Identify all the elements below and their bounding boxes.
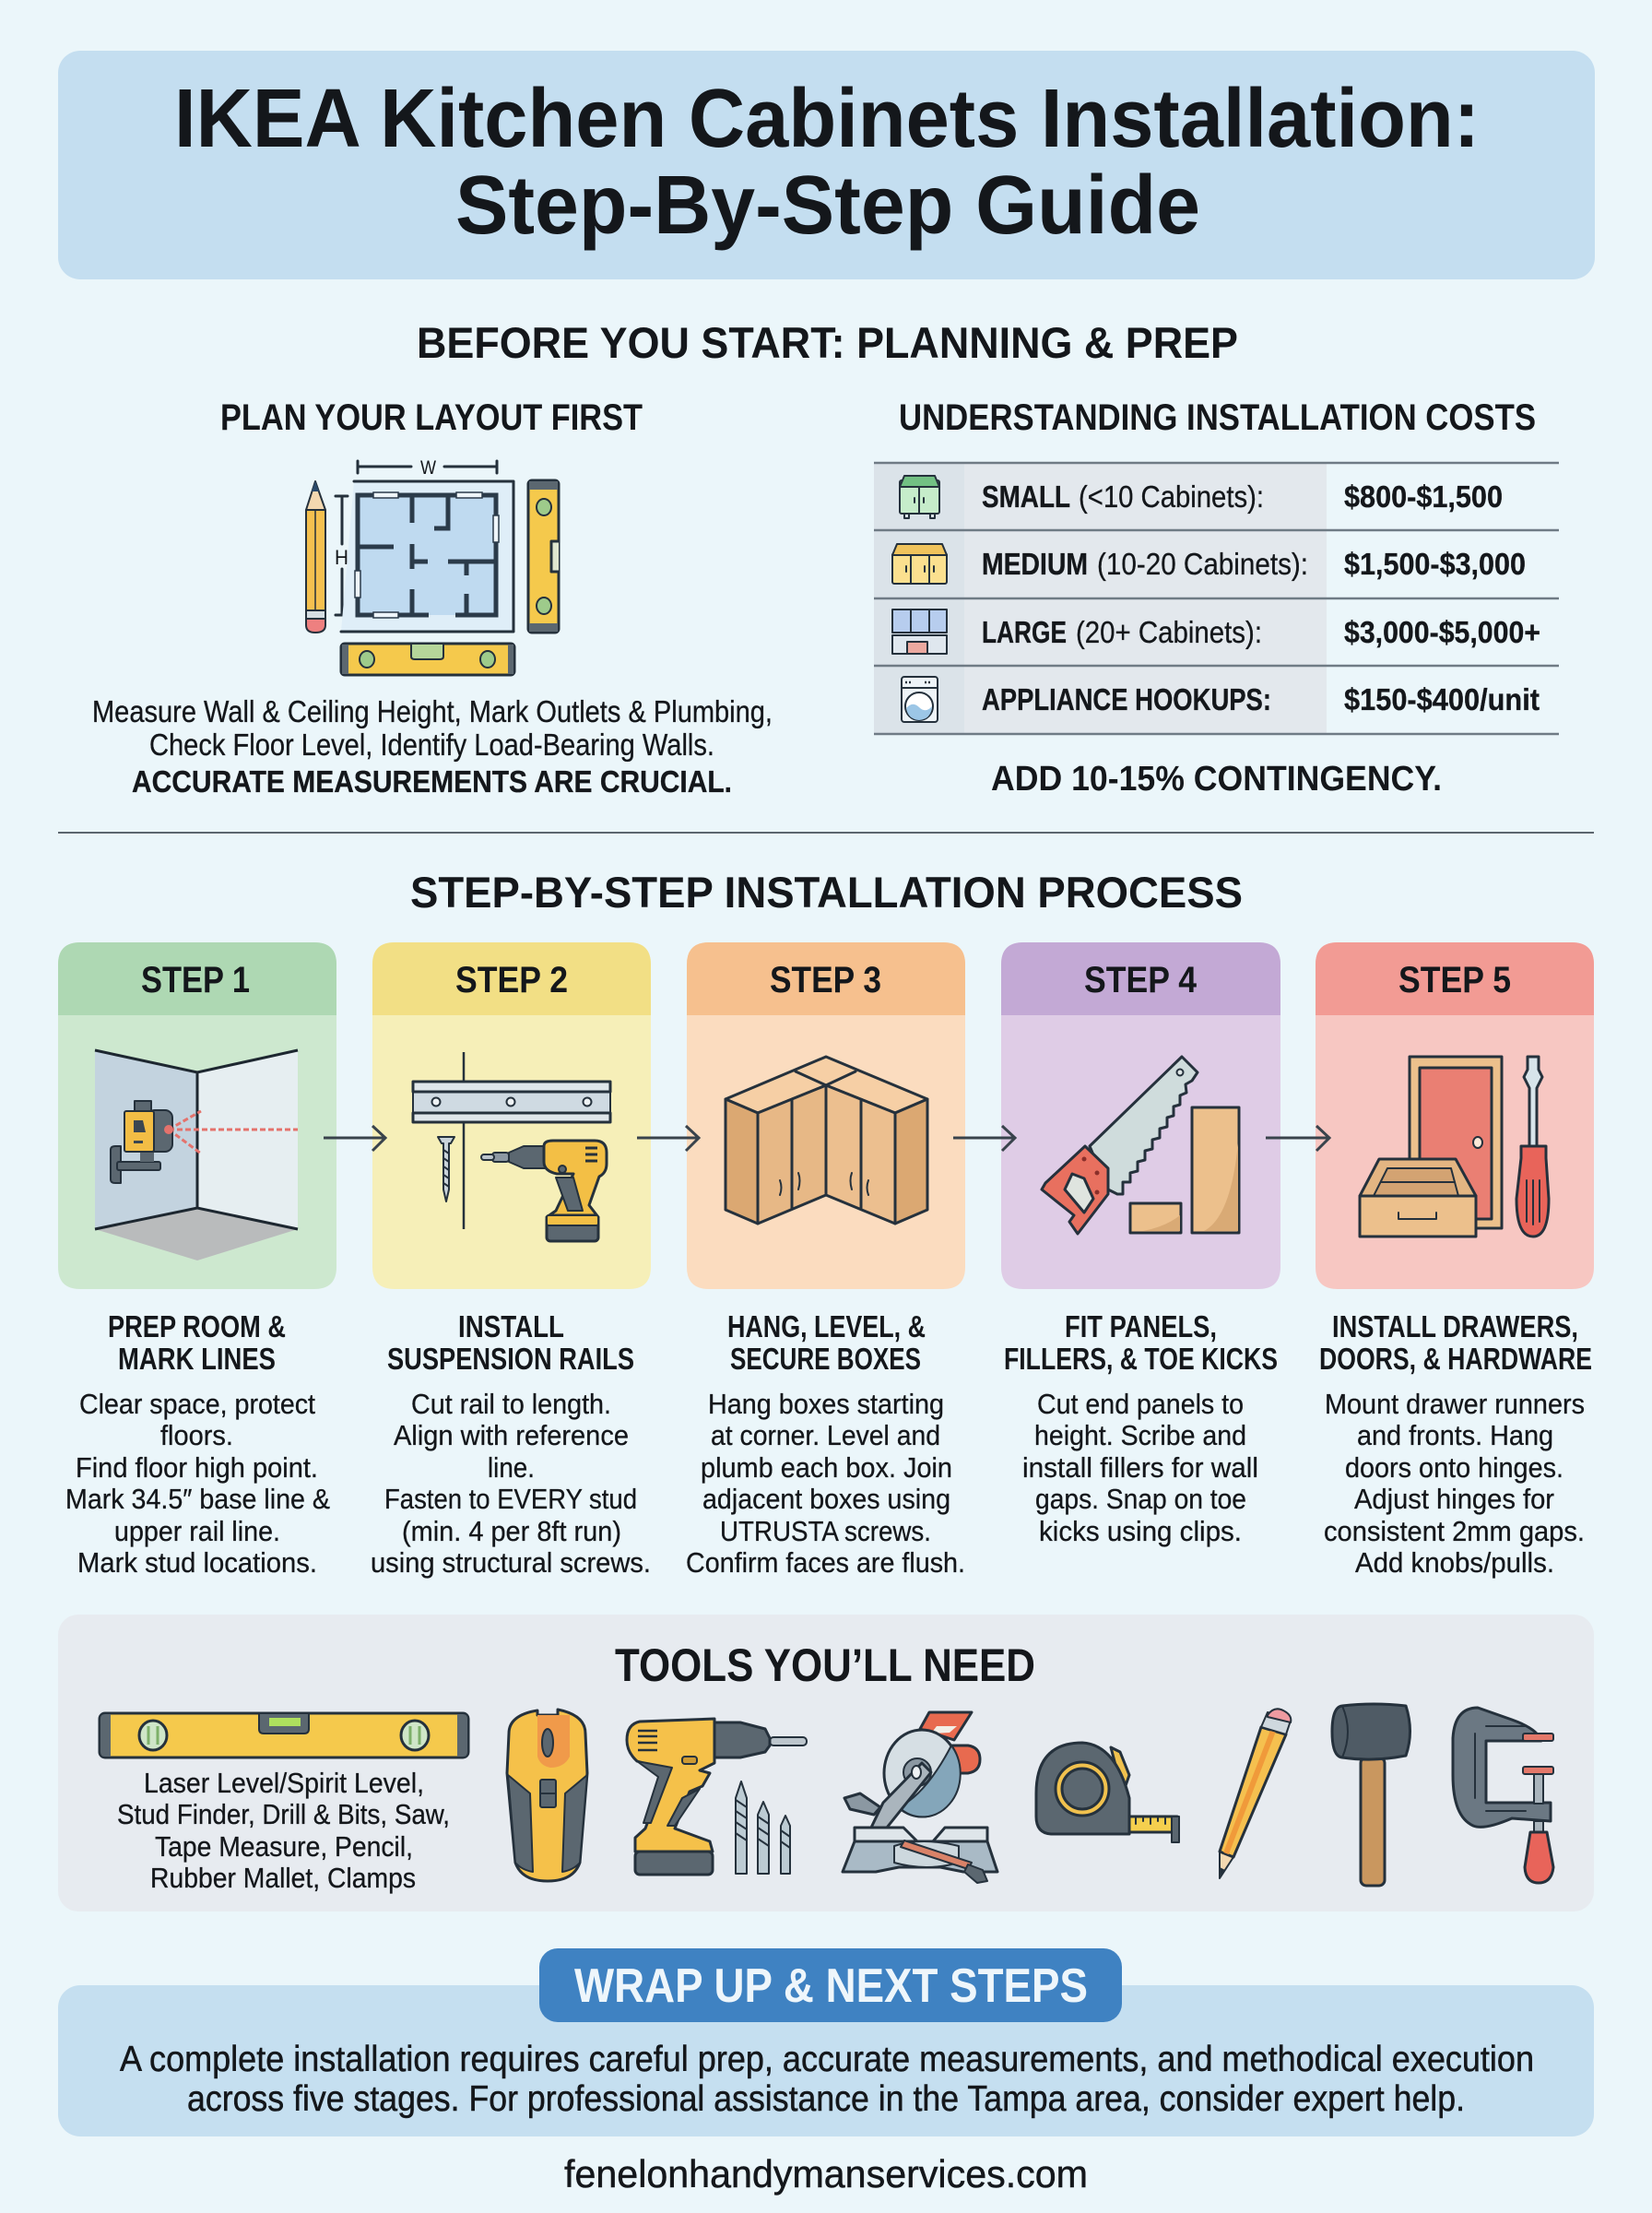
panel: tools <box>58 1615 1594 1911</box>
text block: summary: A complete installation requires careful prep, accurate measurements, and methodical execution <box>120 2040 1534 2079</box>
step 1 text: upper rail line. <box>114 1515 280 1547</box>
row: appliance hookups <box>902 677 1540 722</box>
step label: STEP 3 <box>770 960 881 1000</box>
step 3 text: at corner. Level and <box>711 1419 940 1451</box>
floor plan <box>341 481 513 632</box>
step 3 text <box>686 1309 965 1579</box>
arrow: step 3 to 4 <box>953 1126 1015 1151</box>
row: medium: (10-20 Cabinets): <box>1097 547 1308 581</box>
icon: hand saw and wood pieces <box>1042 1057 1239 1234</box>
step 2 text: Align with reference <box>394 1419 629 1451</box>
step 1 text: Mark 34.5″ base line & <box>65 1483 330 1515</box>
row: small: $800-$1,500 <box>1344 479 1503 514</box>
step 5 text: Mount drawer runners <box>1325 1388 1585 1420</box>
row: appliance hookups: APPLIANCE HOOKUPS: <box>982 682 1271 716</box>
icon: small cabinet <box>900 476 939 518</box>
row: large: $3,000-$5,000+ <box>1344 615 1540 649</box>
step 4 text <box>1004 1309 1278 1547</box>
wood pieces <box>1130 1107 1239 1233</box>
step 1 text: Clear space, protect <box>79 1388 315 1420</box>
step 3 text: HANG, LEVEL, & <box>727 1309 926 1343</box>
row: medium: MEDIUM <box>982 547 1088 581</box>
callout: contingency: ADD 10-15% CONTINGENCY. <box>991 760 1442 799</box>
step 2 text: using structural screws. <box>371 1546 651 1579</box>
icon: pencil <box>306 481 325 633</box>
icon: large cabinets <box>892 609 947 654</box>
step 4 text: Cut end panels to <box>1037 1388 1244 1420</box>
heading: step-by-step process: STEP-BY-STEP INSTALLATION PROCESS <box>410 868 1243 917</box>
title <box>174 73 1480 252</box>
text block: measurements: Check Floor Level, Identify Load-Bearing Walls. <box>149 728 714 762</box>
row: large <box>892 609 1540 654</box>
text block: summary <box>120 2040 1534 2119</box>
step 2 text: Cut rail to length. <box>411 1388 611 1420</box>
step 2 text: INSTALL <box>458 1309 564 1343</box>
icon: drill and bits <box>627 1719 807 1875</box>
step 2 text: Fasten to EVERY stud <box>384 1483 637 1515</box>
title: IKEA Kitchen Cabinets Installation: <box>174 73 1480 165</box>
step 5 text <box>1319 1309 1592 1579</box>
panel: installation costs <box>874 397 1559 799</box>
step 4 text: gaps. Snap on toe <box>1035 1483 1246 1515</box>
step descriptions <box>65 1309 1592 1579</box>
row: large: LARGE <box>982 615 1067 649</box>
step 3 text: SECURE BOXES <box>730 1342 921 1376</box>
arrow: step 2 to 3 <box>637 1126 699 1151</box>
step label: STEP 2 <box>455 960 568 1000</box>
step 4 text: kicks using clips. <box>1039 1515 1242 1547</box>
icon: room corner with laser level <box>95 1050 298 1260</box>
text block: tool list: Tape Measure, Pencil, <box>155 1830 413 1863</box>
step 3 text: Hang boxes starting <box>708 1388 944 1420</box>
row: appliance hookups: $150-$400/unit <box>1344 682 1540 716</box>
heading: plan your layout first: PLAN YOUR LAYOUT FIRST <box>220 397 643 438</box>
step 5 text: doors onto hinges. <box>1345 1451 1564 1484</box>
icon: spirit level <box>100 1713 468 1757</box>
icon: drill <box>481 1141 607 1241</box>
heading: tools: TOOLS YOU’LL NEED <box>615 1639 1035 1691</box>
row: small: (<10 Cabinets): <box>1079 479 1264 514</box>
step 2 text: SUSPENSION RAILS <box>387 1342 634 1376</box>
step 1 text: PREP ROOM & <box>108 1309 286 1343</box>
step 3 text: plumb each box. Join <box>701 1451 952 1484</box>
badge: wrap up and next steps <box>539 1948 1122 2022</box>
icon: tape measure <box>1036 1743 1179 1842</box>
step 1 text: Find floor high point. <box>76 1451 318 1484</box>
screwdriver <box>1516 1057 1549 1237</box>
row: small: SMALL <box>982 479 1070 514</box>
step 2 text: line. <box>488 1451 535 1484</box>
text block: tool list: Rubber Mallet, Clamps <box>150 1862 416 1894</box>
step 3 card <box>687 942 965 1289</box>
icon: washing machine <box>902 677 938 722</box>
step 5 text: Add knobs/pulls. <box>1355 1546 1554 1579</box>
icon: door, drawer and screwdriver <box>1360 1057 1549 1237</box>
icon: pencil <box>1220 1709 1291 1878</box>
icon: screw <box>438 1137 454 1201</box>
step 1 text: Mark stud locations. <box>77 1546 317 1579</box>
step 5 card <box>1316 942 1594 1289</box>
drawer <box>1360 1159 1476 1237</box>
step 4 card <box>1001 942 1280 1289</box>
heading: understanding costs: UNDERSTANDING INSTALLATION COSTS <box>899 397 1536 438</box>
step 4 text: height. Scribe and <box>1034 1419 1246 1451</box>
icon: corner cabinet boxes <box>726 1057 927 1224</box>
arrow: step 4 to 5 <box>1266 1126 1329 1151</box>
width dimension <box>358 457 497 479</box>
row: large: (20+ Cabinets): <box>1076 615 1262 649</box>
text block: tool list <box>117 1767 450 1894</box>
step 4 text: install fillers for wall <box>1022 1451 1258 1484</box>
step 2 text: (min. 4 per 8ft run) <box>402 1515 621 1547</box>
step 1 text <box>65 1309 330 1579</box>
header banner <box>58 51 1595 279</box>
panel: plan your layout <box>92 397 773 799</box>
text block: summary: across five stages. For professional assistance in the Tampa area, consider expert help. <box>187 2079 1465 2119</box>
step 4 text: FILLERS, & TOE KICKS <box>1004 1342 1278 1376</box>
icon: medium cabinet <box>892 544 947 584</box>
badge: wrap up and next steps: WRAP UP & NEXT STEPS <box>574 1959 1088 2013</box>
icon: floor plan with pencil and levels <box>306 457 559 675</box>
row: medium: $1,500-$3,000 <box>1344 547 1526 581</box>
step label: STEP 5 <box>1398 960 1511 1000</box>
icon: stud finder <box>507 1710 587 1881</box>
step 5 text: and fronts. Hang <box>1357 1419 1553 1451</box>
cost table <box>874 463 1559 734</box>
text block: tool list: Stud Finder, Drill & Bits, Saw, <box>117 1798 450 1830</box>
footer: website: fenelonhandymanservices.com <box>564 2152 1088 2195</box>
icon: horizontal spirit level <box>341 644 514 675</box>
panel: wrap up <box>58 1948 1594 2136</box>
row: medium <box>892 544 1526 584</box>
icon: vertical spirit level <box>528 480 559 633</box>
height dimension: H <box>335 546 348 569</box>
step 5 text: INSTALL DRAWERS, <box>1332 1309 1578 1343</box>
icon: miter saw <box>843 1712 997 1883</box>
icon: C clamp <box>1453 1708 1553 1883</box>
height dimension <box>335 496 348 615</box>
step 3 text: Confirm faces are flush. <box>686 1546 965 1579</box>
step 2 text <box>371 1309 651 1579</box>
step 1 card <box>58 942 336 1289</box>
arrow: step 1 to 2 <box>324 1126 385 1151</box>
step 3 text: UTRUSTA screws. <box>720 1515 931 1547</box>
step 1 text: MARK LINES <box>118 1342 276 1376</box>
text block: measurements: Measure Wall & Ceiling Height, Mark Outlets & Plumbing, <box>92 694 773 728</box>
text block: measurements <box>92 694 773 799</box>
icon: suspension rail, screw and drill <box>413 1052 610 1241</box>
step 1 text: floors. <box>160 1419 233 1451</box>
step label: STEP 4 <box>1084 960 1198 1000</box>
row: small <box>900 476 1503 518</box>
step 5 text: Adjust hinges for <box>1354 1483 1554 1515</box>
step 5 text: consistent 2mm gaps. <box>1324 1515 1585 1547</box>
heading: before you start: BEFORE YOU START: PLANNING & PREP <box>417 318 1238 367</box>
step 2 card <box>372 942 651 1289</box>
step 5 text: DOORS, & HARDWARE <box>1319 1342 1592 1376</box>
step 3 text: adjacent boxes using <box>702 1483 950 1515</box>
title: Step-By-Step Guide <box>455 160 1200 252</box>
step label: STEP 1 <box>141 960 250 1000</box>
text block: measurements: ACCURATE MEASUREMENTS ARE CRUCIAL. <box>132 764 732 799</box>
icon: rubber mallet <box>1332 1704 1410 1886</box>
drill bits <box>736 1781 790 1874</box>
width dimension: W <box>420 457 436 479</box>
step 4 text: FIT PANELS, <box>1065 1309 1217 1343</box>
text block: tool list: Laser Level/Spirit Level, <box>144 1767 424 1799</box>
